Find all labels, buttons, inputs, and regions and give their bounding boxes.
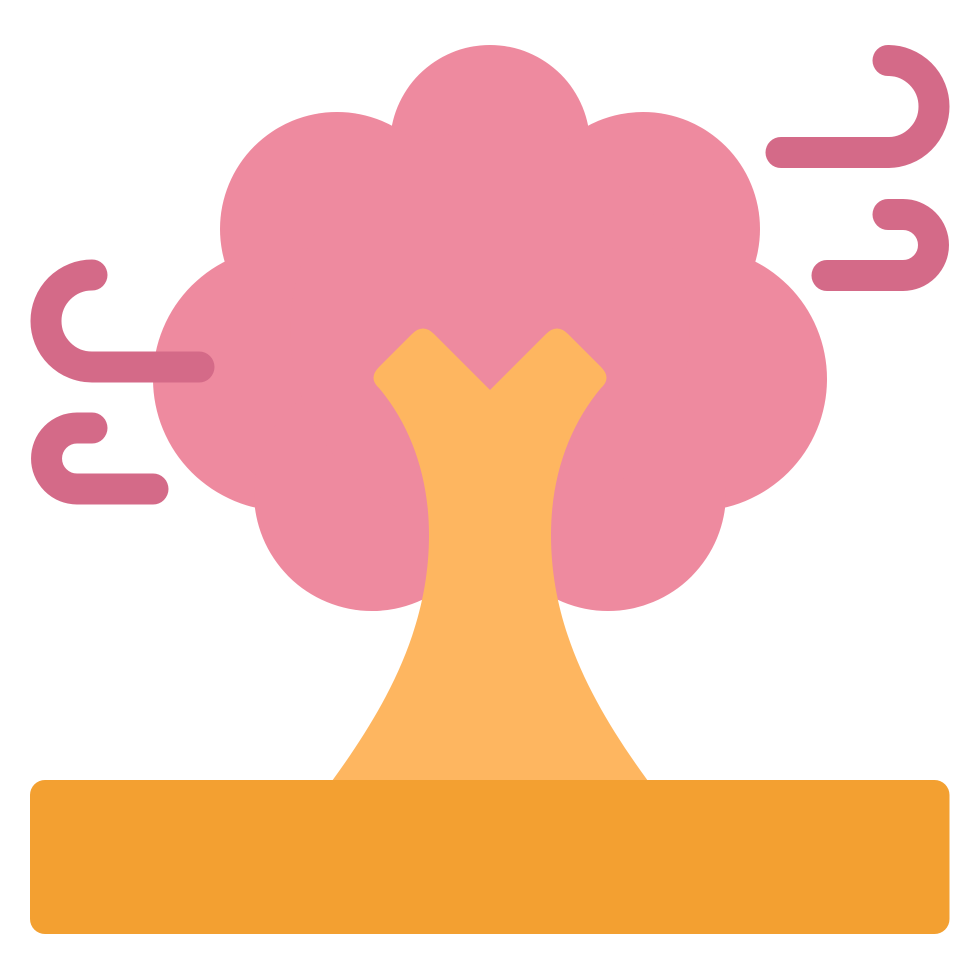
wind: lower left gust xyxy=(47,428,153,489)
tree canopy xyxy=(153,45,827,611)
ground xyxy=(30,780,950,934)
wind: lower right gust xyxy=(827,214,933,276)
wind: upper left gust xyxy=(46,275,199,367)
tree trunk xyxy=(332,328,648,781)
wind: upper right gust xyxy=(781,60,934,152)
